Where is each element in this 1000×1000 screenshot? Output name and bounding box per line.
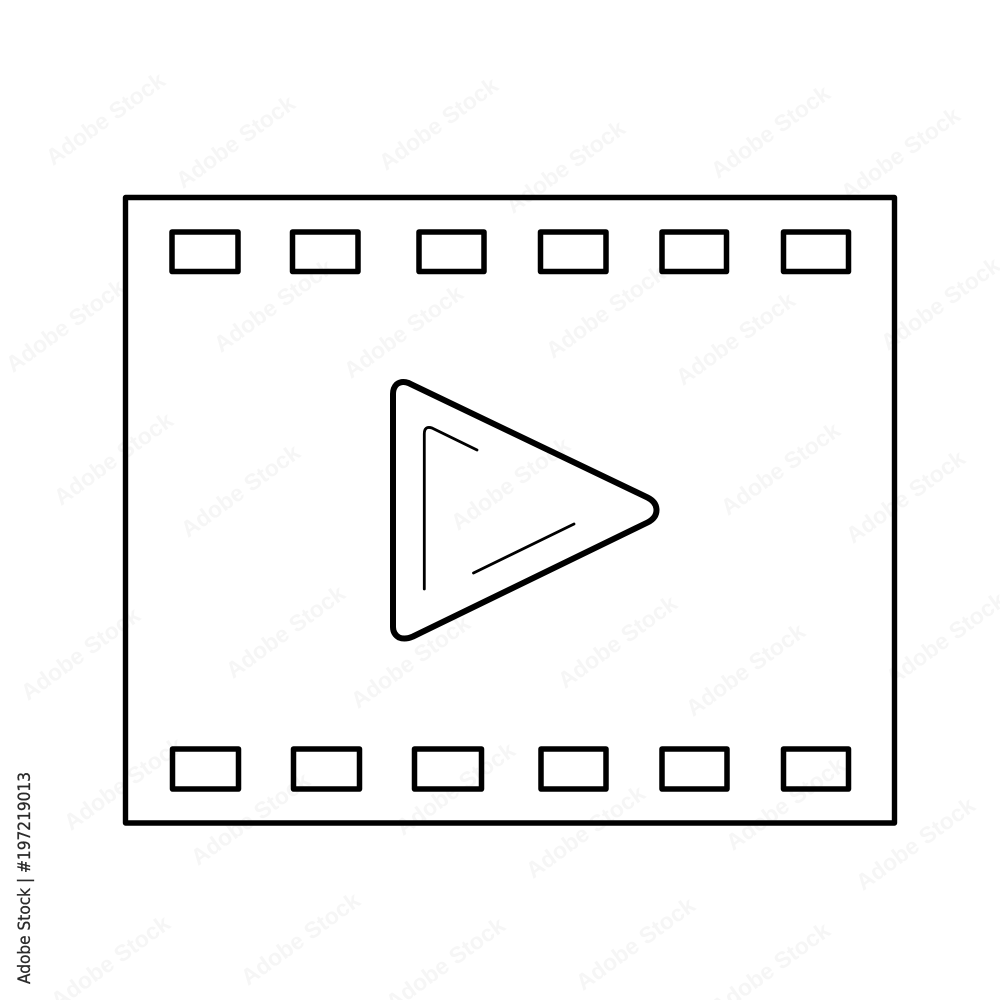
watermark pattern: Adobe Stock xyxy=(346,610,475,713)
watermark pattern: Adobe Stock xyxy=(221,580,350,683)
watermark pattern: Adobe Stock xyxy=(851,792,980,895)
watermark pattern: Adobe Stock xyxy=(841,445,970,548)
watermark pattern: Adobe Stock xyxy=(171,90,300,193)
watermark pattern: Adobe Stock xyxy=(209,254,338,357)
play triangle xyxy=(393,382,656,639)
play triangle inner highlight, upper xyxy=(424,427,477,589)
stock image id caption: Adobe Stock | #197219013 xyxy=(15,772,34,984)
watermark pattern: Adobe Stock xyxy=(186,767,315,870)
watermark pattern: Adobe Stock xyxy=(501,115,630,218)
watermark pattern: Adobe Stock xyxy=(521,780,650,883)
watermark pattern: Adobe Stock xyxy=(49,407,178,510)
watermark pattern: Adobe Stock xyxy=(374,72,503,175)
watermark pattern: Adobe Stock xyxy=(681,618,810,721)
watermark pattern: Adobe Stock xyxy=(339,280,468,383)
film frame outline xyxy=(126,198,894,823)
watermark pattern: Adobe Stock xyxy=(706,80,835,183)
watermark pattern: Adobe Stock xyxy=(836,102,965,205)
watermark pattern: Adobe Stock xyxy=(553,590,682,693)
top sprocket holes xyxy=(172,232,848,272)
watermark pattern: Adobe Stock xyxy=(671,287,800,390)
bottom sprocket holes xyxy=(172,749,848,789)
watermark pattern: Adobe Stock xyxy=(391,737,520,840)
watermark pattern: Adobe Stock xyxy=(716,417,845,520)
play triangle inner highlight, lower xyxy=(474,524,574,573)
watermark pattern: Adobe Stock xyxy=(446,432,575,535)
watermark pattern: Adobe Stock xyxy=(236,887,365,990)
watermark pattern: Adobe Stock xyxy=(16,602,145,705)
watermark pattern: Adobe Stock xyxy=(176,439,305,542)
watermark pattern: Adobe Stock xyxy=(1,274,130,377)
watermark pattern: Adobe Stock xyxy=(541,260,670,363)
watermark pattern: Adobe Stock xyxy=(721,752,850,855)
film strip icon xyxy=(126,198,894,823)
watermark pattern: Adobe Stock xyxy=(59,732,188,835)
watermark pattern: Adobe Stock xyxy=(41,67,170,170)
watermark pattern: Adobe Stock xyxy=(571,892,700,995)
